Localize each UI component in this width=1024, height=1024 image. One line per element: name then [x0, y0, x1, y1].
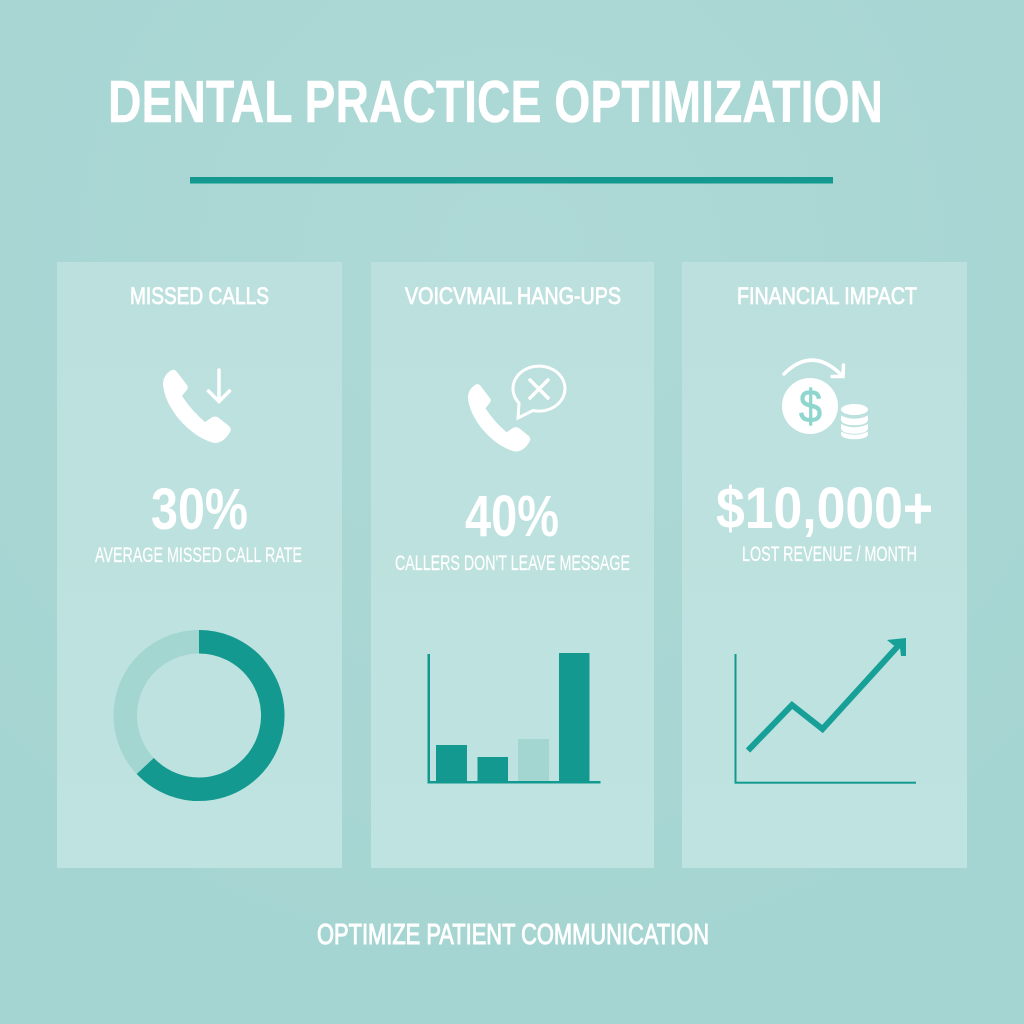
bar chart	[428, 653, 600, 784]
footer tagline: OPTIMIZE PATIENT COMMUNICATION	[317, 919, 709, 951]
stat: 40%: 40%	[465, 484, 559, 549]
panel: financial impact	[682, 262, 967, 868]
caption: callers don't leave message: CALLERS DON'T LEAVE MESSAGE	[395, 552, 630, 575]
heading: voicemail hang-ups: VOICVMAIL HANG-UPS	[405, 283, 621, 310]
heading: financial impact: FINANCIAL IMPACT	[737, 283, 917, 310]
donut chart	[125, 642, 273, 789]
line chart with rising arrow	[734, 638, 916, 784]
stat: $10,000+: $10,000+	[716, 476, 933, 541]
title underline	[190, 177, 833, 184]
panel: missed calls	[57, 262, 342, 868]
caption: average missed call rate: AVERAGE MISSED CALL RATE	[95, 544, 302, 567]
icon: dollar coin with stack and arrow	[782, 360, 868, 439]
icon: phone with speech bubble x	[468, 366, 565, 452]
heading: missed calls: MISSED CALLS	[130, 283, 269, 310]
icon: phone with down arrow	[163, 370, 231, 443]
caption: lost revenue / month: LOST REVENUE / MONTH	[742, 543, 917, 566]
icon: dollar coin with stack and arrow: $	[799, 380, 822, 432]
stat: 30%: 30%	[151, 477, 248, 542]
panel: voicemail hang-ups	[371, 262, 654, 868]
